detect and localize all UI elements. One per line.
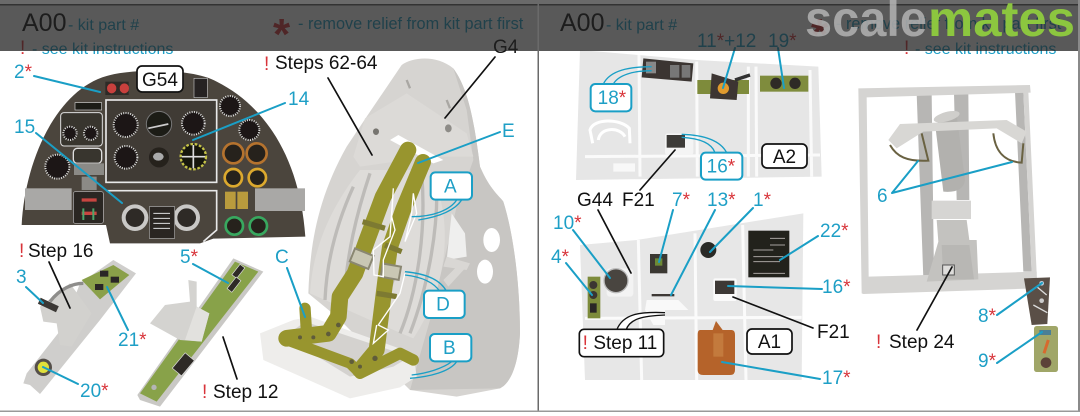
panel: left console with lever, Step 16 xyxy=(23,260,136,394)
leader lines and labels: left sheet: ! xyxy=(19,241,24,262)
seat cushion ribs xyxy=(310,170,445,338)
part 4 xyxy=(588,277,600,318)
panel: seat with harness xyxy=(260,59,520,398)
leader lines and labels: right sheet: G44 xyxy=(577,190,613,211)
leader lines and labels: left sheet: Steps 62-64 xyxy=(275,53,378,74)
cylinder xyxy=(935,115,965,192)
callout: 18* xyxy=(591,67,652,111)
part 1 xyxy=(700,242,716,258)
leader lines and labels: left sheet: ! xyxy=(202,382,207,403)
leader lines and labels: left sheet: 21* xyxy=(118,330,147,351)
callout: Step 11 xyxy=(579,312,665,357)
panel: A2 parts sheet xyxy=(576,50,822,180)
watermark: scalemates xyxy=(805,0,1075,47)
cross bar xyxy=(888,120,1027,148)
leader lines and labels: left sheet: E xyxy=(502,121,515,142)
leader lines and labels: right sheet: ! xyxy=(876,332,881,353)
callout: D: D xyxy=(436,295,450,316)
leader lines and labels: left sheet: ! xyxy=(264,54,269,75)
leader lines and labels: left sheet: 14 xyxy=(288,89,310,110)
seat back shell xyxy=(308,59,520,397)
leader lines and labels: right sheet: 16* xyxy=(822,277,851,298)
legend: left: - see kit instructions xyxy=(32,41,173,58)
leader lines and labels: left sheet: Step 12 xyxy=(213,382,278,403)
seat head block xyxy=(353,93,473,167)
leader lines and labels: left sheet: 3 xyxy=(16,267,27,288)
leader lines and labels: right sheet: F21 xyxy=(622,190,655,211)
part 22 xyxy=(748,231,789,277)
part 7 xyxy=(650,254,667,273)
legend: left: - remove relief from kit part first xyxy=(298,15,524,33)
part 13 xyxy=(645,300,688,325)
leader lines and labels: right sheet: 9* xyxy=(978,351,997,372)
panel: long green console, Step 12 xyxy=(137,258,263,407)
legend: left xyxy=(20,9,524,59)
leader lines and labels: right sheet: 1* xyxy=(753,190,772,211)
leader lines and labels: right sheet: 4* xyxy=(551,247,570,268)
leader lines and labels: right sheet: 11*+12 xyxy=(697,31,756,52)
panel: A1 parts sheet xyxy=(580,213,803,380)
legend: right: A00 xyxy=(560,9,604,37)
leader lines and labels: right sheet xyxy=(551,31,1042,389)
leader lines and labels: left sheet: 5* xyxy=(180,247,199,268)
legend: left: * xyxy=(273,10,291,59)
seat pan xyxy=(260,317,417,398)
leader lines and labels: right sheet: 7* xyxy=(672,190,691,211)
part 19 xyxy=(760,76,808,92)
label box: A1 xyxy=(747,329,792,354)
part 16 xyxy=(665,133,693,155)
header band overlay xyxy=(0,0,1080,51)
panel: instrument panel G54 xyxy=(22,71,305,243)
harness belts xyxy=(287,150,423,373)
legend: right: - remove relief from kit part first xyxy=(836,15,1062,33)
leader lines and labels: left sheet xyxy=(14,37,519,403)
callout: D xyxy=(405,272,465,318)
leader lines and labels: right sheet: 8* xyxy=(978,306,997,327)
part 9 xyxy=(1034,326,1058,372)
callout: 16* top xyxy=(682,134,742,180)
part 11+12 xyxy=(697,80,749,94)
frame columns xyxy=(917,92,1032,278)
leader lines and labels: right sheet: Step 24 xyxy=(889,332,955,353)
legend: right: ! xyxy=(904,38,909,59)
callout: Step 11: ! xyxy=(583,333,588,354)
part 10 xyxy=(607,268,633,297)
leader lines and labels: left sheet: 2* xyxy=(14,62,33,83)
white outline arrows xyxy=(373,188,417,343)
lower column xyxy=(932,201,971,219)
callout: A: A xyxy=(444,176,457,197)
part 8 xyxy=(1024,277,1050,325)
panel: seat frame xyxy=(858,85,1058,372)
leader lines and labels: left sheet: C xyxy=(275,247,289,268)
legend: left: A00 xyxy=(22,9,66,37)
legend: left: ! xyxy=(20,38,25,59)
callout: B: B xyxy=(443,338,456,359)
leader lines and labels: right sheet: 17* xyxy=(822,368,851,389)
leader lines and labels: left sheet: Step 16 xyxy=(28,241,94,262)
part 16 block xyxy=(713,278,737,301)
legend: right: - kit part # xyxy=(606,17,677,34)
leader lines and labels: right sheet: 22* xyxy=(820,221,849,242)
callout: Step 11: Step 11 xyxy=(593,333,657,354)
legend: left: - kit part # xyxy=(68,17,139,34)
legend: right xyxy=(560,9,1062,59)
leader lines and labels: right sheet: F21 xyxy=(817,322,850,343)
legend: right: - see kit instructions xyxy=(915,41,1056,58)
label box: A1: A1 xyxy=(758,332,781,353)
callout: B xyxy=(410,334,471,378)
label box: G54: G54 xyxy=(142,70,178,91)
leader lines and labels: right sheet: 6 xyxy=(877,186,888,207)
leader lines and labels: left sheet: 20* xyxy=(80,381,109,402)
callout: 16* top: 16* xyxy=(707,156,736,177)
straps xyxy=(890,133,1023,163)
frame outer bars xyxy=(858,85,1037,294)
seat shading xyxy=(410,68,520,390)
leader lines and labels: right sheet: 19* xyxy=(768,31,797,52)
label box: A2 xyxy=(762,144,807,168)
part 17 xyxy=(698,321,735,375)
leader lines and labels: right sheet: 13* xyxy=(707,190,736,211)
leader lines and labels: right sheet: 10* xyxy=(553,213,582,234)
leader lines and labels: left sheet: G4 xyxy=(493,37,519,58)
callout: A xyxy=(412,172,472,220)
leader lines and labels: left sheet: 15 xyxy=(14,117,35,138)
callout: 18*: 18* xyxy=(598,88,627,109)
label box: A2: A2 xyxy=(773,147,796,168)
part 18 xyxy=(642,58,693,82)
legend: right: * xyxy=(811,10,829,59)
label box: G54 xyxy=(137,66,183,92)
